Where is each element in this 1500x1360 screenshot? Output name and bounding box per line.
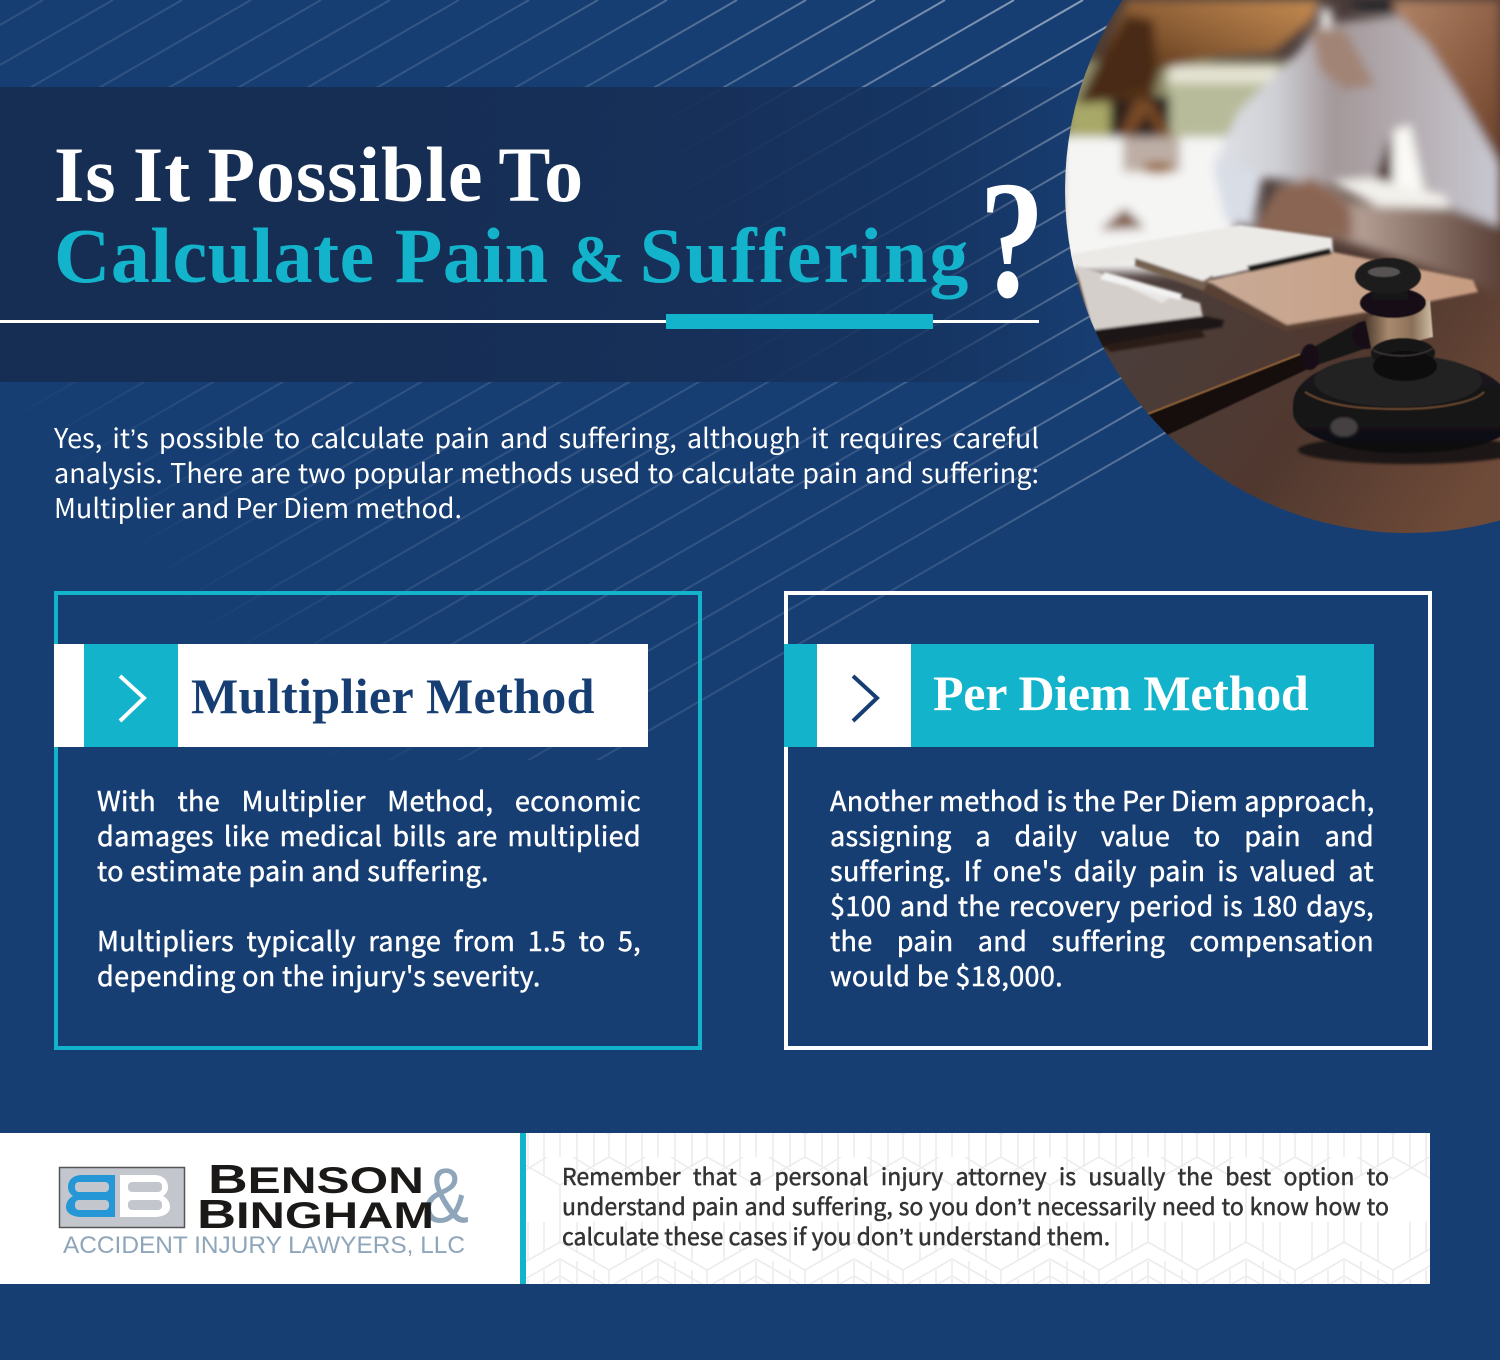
- intro text: analysis. There are two popular methods used to calculate pain and suffering:: [54, 452, 1039, 491]
- per diem text: the pain and suffering compensation: [830, 920, 1374, 959]
- question mark: ?: [979, 147, 1045, 333]
- logo: Benson & Bingham: &: [423, 1151, 469, 1239]
- title rule: [0, 314, 1039, 329]
- footer text: Remember that a personal injury attorney is usually the best option to: [562, 1158, 1389, 1192]
- intro text: [54, 417, 1039, 526]
- intro text: Yes, it’s possible to calculate pain and suffering, although it requires careful: [54, 417, 1039, 456]
- logo: Benson & Bingham: B ENSON: [208, 1156, 424, 1202]
- title band: [0, 87, 1110, 382]
- footer logo panel: [0, 1133, 520, 1284]
- gavel handle: [1145, 353, 1310, 436]
- footer accent: [520, 1133, 526, 1284]
- icon: chevron: [84, 644, 178, 747]
- multiplier heading: Multiplier Method: [191, 668, 595, 724]
- per diem text: would be $18,000.: [830, 955, 1063, 994]
- footer text: [562, 1158, 1389, 1252]
- base shadow: [1298, 436, 1500, 464]
- per diem text: $100 and the recovery period is 180 days,: [830, 885, 1374, 924]
- multiplier text: damages like medical bills are multiplied: [97, 815, 641, 854]
- multiplier text: to estimate pain and suffering.: [97, 850, 489, 889]
- multiplier text: Multipliers typically range from 1.5 to 5,: [97, 920, 641, 959]
- title: [54, 131, 971, 300]
- photo: gavel on a desk in a circle: [1065, 0, 1500, 533]
- footer text: calculate these cases if you don’t understand them.: [562, 1218, 1110, 1252]
- multiplier text: With the Multiplier Method, economic: [97, 780, 641, 819]
- per diem text: assigning a daily value to pain and: [830, 815, 1374, 854]
- logo: Benson & Bingham: B INGHAM: [197, 1191, 434, 1237]
- gavel head: [1365, 300, 1433, 352]
- logo: Benson & Bingham: [58, 1151, 469, 1259]
- per diem header: [784, 644, 1374, 747]
- panel: per diem method: [784, 591, 1432, 1050]
- logo: Benson & Bingham: ACCIDENT INJURY LAWYERS, LLC: [63, 1232, 465, 1259]
- per diem text: [830, 780, 1375, 994]
- background diagonal lines: [0, 0, 1166, 760]
- per diem text: suffering. If one's daily pain is valued at: [830, 850, 1374, 889]
- panel: multiplier method: [54, 591, 702, 1050]
- multiplier header: [54, 644, 648, 747]
- multiplier text: depending on the injury's severity.: [97, 955, 541, 994]
- per diem heading: Per Diem Method: [933, 665, 1308, 721]
- intro text: Multiplier and Per Diem method.: [54, 487, 462, 526]
- title line 1: Is It Possible To: [54, 131, 584, 218]
- multiplier text: [97, 780, 641, 994]
- footer callout: [526, 1133, 1430, 1284]
- icon: chevron: [817, 644, 911, 747]
- footer text: understand pain and suffering, so you don’t necessarily need to know how to: [562, 1188, 1389, 1222]
- title line 2: Calculate Pain & Suffering: [54, 212, 971, 299]
- per diem text: Another method is the Per Diem approach,: [830, 780, 1375, 819]
- gavel sound block: [1145, 258, 1500, 453]
